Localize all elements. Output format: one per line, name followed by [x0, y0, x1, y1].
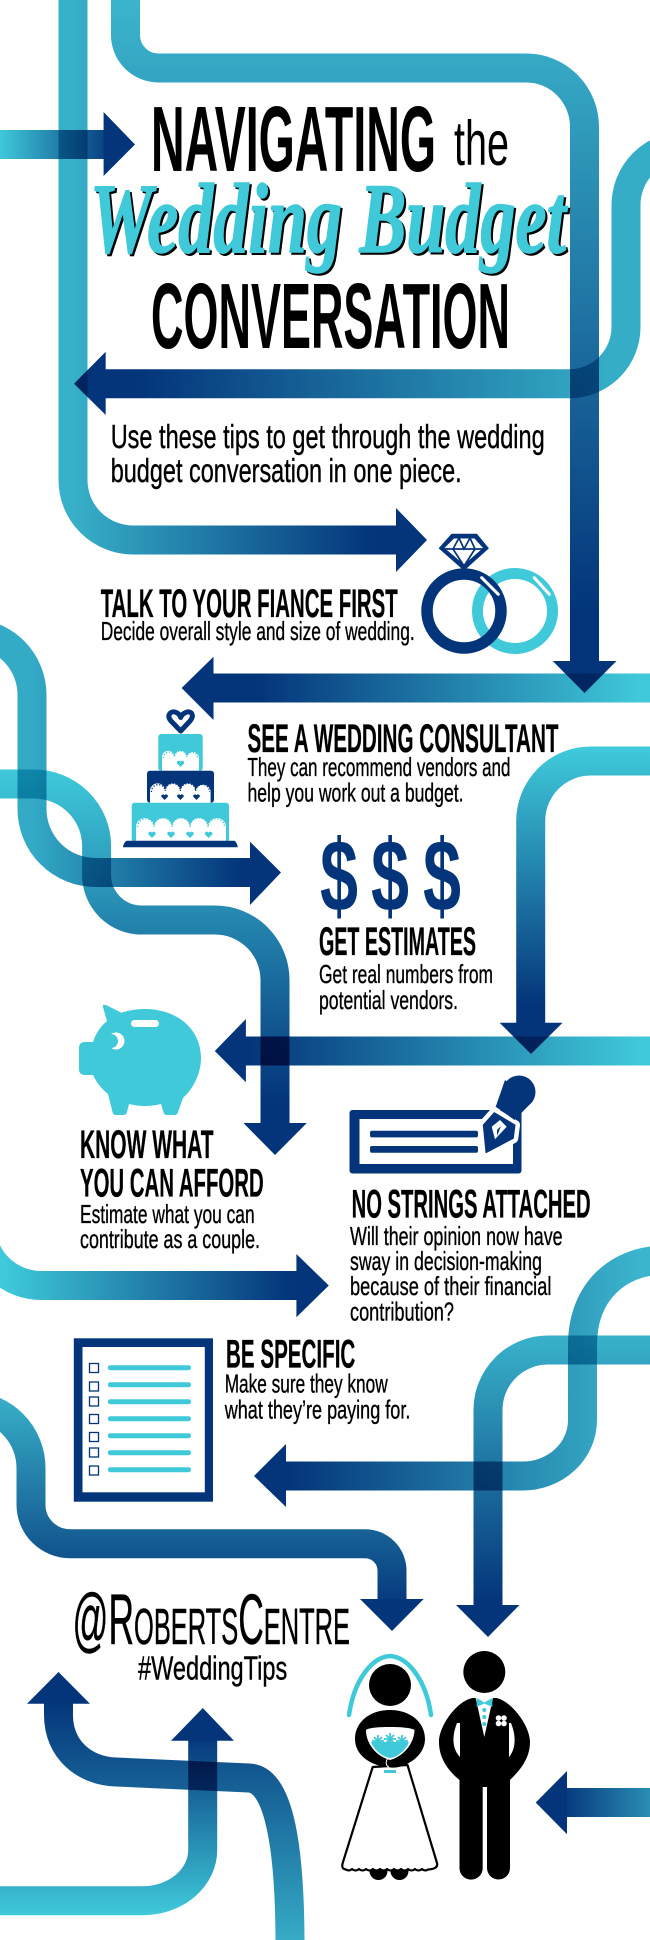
arrow: bottom pipe up to hashtag — [27, 1672, 290, 1940]
text: know what you can afford: contribute as a couple. — [80, 1224, 260, 1254]
text: social handle: #WeddingTips — [138, 1649, 287, 1686]
text: social handle — [72, 1581, 350, 1686]
text: be specific: BE SPECIFIC — [226, 1333, 355, 1377]
text: get estimates: potential vendors. — [319, 985, 458, 1015]
text: get estimates: Get real numbers from — [319, 959, 493, 989]
text: know what you can afford — [80, 1123, 264, 1254]
icon: piggy bank — [79, 1005, 201, 1115]
arrow: from left to strings — [0, 1226, 329, 1317]
text: know what you can afford: Estimate what you can — [80, 1199, 255, 1229]
text: see a wedding consultant — [248, 717, 558, 808]
icon: groom — [439, 1651, 530, 1880]
text: no strings attached: because of their financial — [350, 1271, 551, 1301]
text: see a wedding consultant: help you work out a budget. — [248, 778, 464, 808]
arrow: S curve to be specific — [254, 1260, 650, 1507]
text: be specific: what they’re paying for. — [224, 1394, 410, 1424]
text: talk to your fiance first — [101, 582, 415, 646]
title — [90, 87, 568, 368]
arrow: left pipe down to bride — [0, 1406, 424, 1631]
icon: wedding cake — [123, 712, 238, 847]
text: be specific: Make sure they know — [225, 1369, 388, 1399]
text: get estimates — [319, 920, 493, 1015]
text: no strings attached: sway in decision-making — [350, 1246, 542, 1276]
icon: dollar signs: $ — [371, 819, 409, 933]
icon: cheque and pen — [350, 1076, 536, 1174]
arrow: from right to couple — [536, 1771, 650, 1834]
text: social handle: @ROBERTSCENTRE — [72, 1581, 350, 1660]
text: be specific — [224, 1333, 410, 1424]
text: no strings attached: contribution? — [350, 1297, 454, 1327]
intro text: budget conversation in one piece. — [111, 453, 462, 490]
arrow: from right to consultant — [182, 657, 650, 720]
title: the — [454, 109, 509, 179]
text: no strings attached — [350, 1183, 591, 1327]
intro text — [111, 419, 545, 490]
arrow: right pipe to intro — [74, 146, 650, 415]
arrow: right pipe down to strings — [500, 761, 650, 1054]
arrow: left pipe down to afford — [0, 784, 307, 1155]
text: get estimates: GET ESTIMATES — [319, 920, 476, 964]
arrow: top pipe down the right side — [126, 0, 616, 693]
icon: dollar signs: $ — [320, 819, 358, 933]
arrow: right pipe down to groom — [456, 1350, 650, 1637]
icon: checklist — [74, 1338, 213, 1502]
text: know what you can afford: KNOW WHAT — [80, 1123, 214, 1167]
text: talk to your fiance first: Decide overall style and size of wedding. — [101, 616, 415, 646]
arrow: from right to piggy — [215, 1019, 650, 1082]
icon: dollar signs — [320, 819, 461, 933]
arrow: left pipe to estimates — [0, 633, 281, 905]
icon: dollar signs: $ — [423, 819, 461, 933]
arrow: left pipe to rings — [73, 0, 427, 572]
text: see a wedding consultant: They can recommend vendors and — [248, 752, 510, 782]
text: know what you can afford: YOU CAN AFFORD — [80, 1162, 264, 1206]
icon: bride — [342, 1656, 437, 1880]
icon: wedding rings — [427, 534, 552, 648]
arrow: entering from left to title — [0, 112, 135, 176]
arrow: bottom pipe up second — [0, 1708, 234, 1901]
